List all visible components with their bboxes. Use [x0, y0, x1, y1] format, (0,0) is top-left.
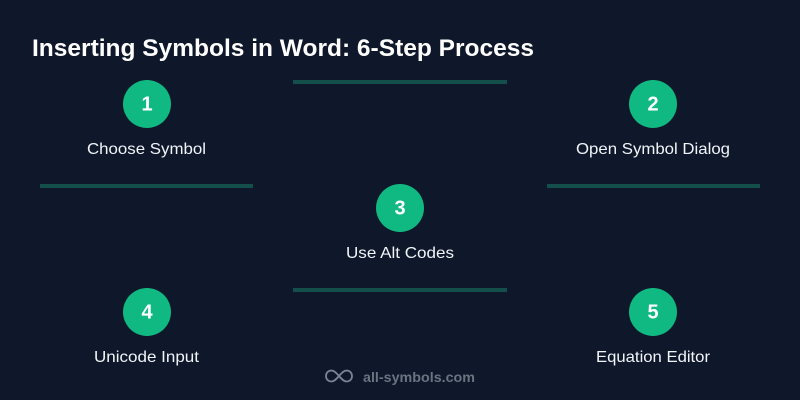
title: Inserting Symbols in Word: 6-Step Process	[32, 35, 534, 62]
step 5	[596, 288, 711, 366]
connector: middle right	[547, 184, 760, 188]
step 2: 2	[647, 94, 659, 116]
step 4: Unicode Input	[94, 349, 200, 366]
step 2: Open Symbol Dialog	[576, 141, 730, 158]
step 3: Use Alt Codes	[346, 245, 454, 262]
step 4: 4	[141, 302, 153, 324]
step 1: Choose Symbol	[87, 141, 206, 158]
step 4	[94, 288, 200, 366]
step 2	[576, 80, 730, 158]
step 1	[87, 80, 206, 158]
step 5: 5	[647, 302, 659, 324]
icon: infinity	[326, 370, 352, 382]
connector: middle left	[40, 184, 253, 188]
step 5: Equation Editor	[596, 349, 711, 366]
step 1: 1	[141, 94, 153, 116]
step 3: 3	[394, 198, 406, 220]
watermark: all-symbols.com	[363, 369, 475, 385]
step 3	[346, 184, 454, 262]
connector: bottom centre	[293, 288, 507, 292]
connector: top centre	[293, 80, 507, 84]
